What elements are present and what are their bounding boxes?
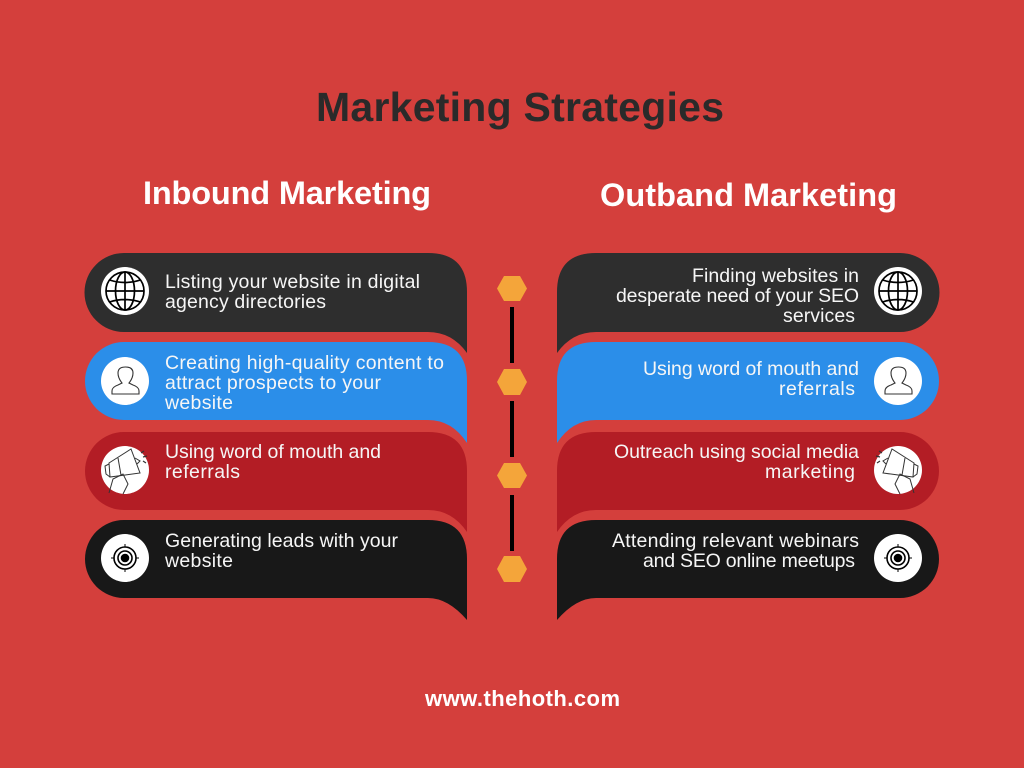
icon: person [874,357,922,405]
panel: social media outreach: Outreach using social media [614,441,859,463]
panel: finding websites: Finding websites in [692,265,859,287]
panel: word of mouth: Using word of mouth and [165,441,381,463]
panel: finding websites: desperate need of your SEO [616,285,859,307]
icon: megaphone [874,446,922,494]
panel: inbound column [84,253,467,620]
heading: inbound marketing: Inbound Marketing [143,175,431,211]
panel: outband column [557,253,940,620]
panel: webinars and meetups [557,520,939,620]
panel: listing website [84,253,467,353]
panel: generating leads: Generating leads with your [165,530,398,552]
panel: listing website: agency directories [165,291,326,313]
panel: generating leads [85,520,467,620]
panel: listing website: Listing your website in digital [165,271,420,293]
timeline: hexagons and connectors [497,276,527,582]
panel: high-quality content: website [164,392,233,414]
icon: megaphone [101,446,149,494]
heading: outband marketing: Outband Marketing [600,177,897,213]
panel: high-quality content: Creating high-quality content to [165,352,444,374]
panel: high-quality content [85,342,467,443]
panel: word of mouth and referrals: Using word of mouth and [643,358,859,380]
panel: word of mouth and referrals: referrals [779,378,855,400]
panel: finding websites: services [783,305,855,327]
title: Marketing Strategies [316,84,724,130]
panel: webinars and meetups: and SEO online meetups [643,550,855,572]
panel: social media outreach: marketing [765,461,855,483]
footer url: www.thehoth.com [424,686,620,711]
panel: generating leads: website [164,550,233,572]
icon: globe [101,267,149,315]
icon: person [101,357,149,405]
panel: word of mouth [85,432,467,532]
panel: word of mouth: referrals [165,461,240,483]
panel: high-quality content: attract prospects to your [165,372,382,394]
panel: word of mouth and referrals [557,342,939,443]
panel: webinars and meetups: Attending relevant webinars [612,530,859,552]
icon: globe [874,267,922,315]
panel: finding websites [557,253,940,353]
icon: target [874,534,922,582]
icon: target [101,534,149,582]
panel: social media outreach [557,432,939,532]
